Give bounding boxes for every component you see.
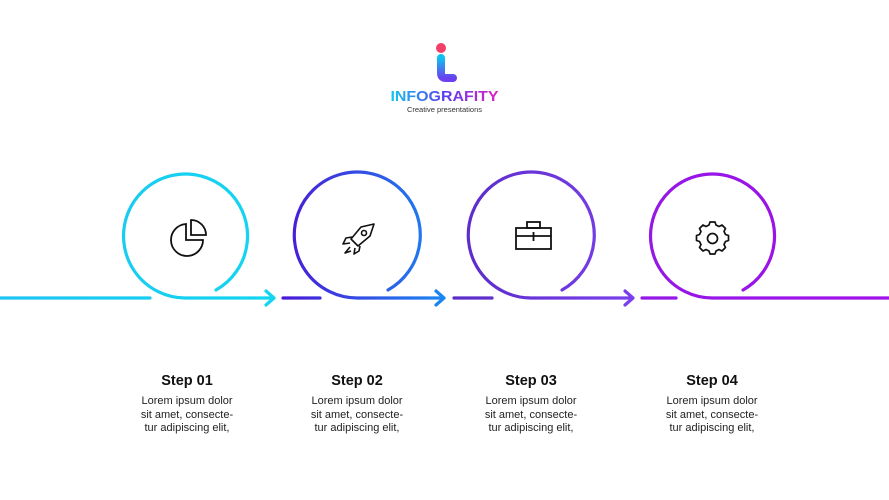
- icon: rocket: [343, 224, 374, 254]
- text: step 04: [666, 373, 758, 434]
- icon: briefcase: [516, 222, 551, 249]
- text: step 01: [141, 373, 233, 434]
- logo: Creative presentations: [407, 105, 482, 114]
- icon: pie chart: [171, 220, 206, 256]
- text: step 03: Step 03: [505, 373, 557, 389]
- text: step 04: Lorem ipsum dolor: [666, 395, 758, 407]
- text: step 01: tur adipiscing elit,: [144, 422, 230, 434]
- text: step 02: [311, 373, 403, 434]
- step 2 timeline loop: [283, 172, 444, 305]
- logo: [390, 43, 498, 114]
- text: step 03: sit amet, consecte-: [485, 408, 577, 420]
- step 1 timeline loop: [0, 174, 274, 305]
- icon: gear: [696, 222, 728, 254]
- text: step 04: sit amet, consecte-: [666, 408, 758, 420]
- text: step 02: Step 02: [331, 373, 383, 389]
- text: step 01: Step 01: [161, 373, 213, 389]
- text: step 02: Lorem ipsum dolor: [311, 395, 403, 407]
- text: step 01: Lorem ipsum dolor: [141, 395, 233, 407]
- text: step 01: sit amet, consecte-: [141, 408, 233, 420]
- text: step 04: Step 04: [686, 373, 738, 389]
- text: step 03: Lorem ipsum dolor: [485, 395, 577, 407]
- step 3 timeline loop: [454, 172, 633, 305]
- text: step 03: [485, 373, 577, 434]
- text: step 03: tur adipiscing elit,: [488, 422, 574, 434]
- text: step 04: tur adipiscing elit,: [670, 422, 754, 434]
- text: step 02: sit amet, consecte-: [311, 408, 403, 420]
- logo: INFOGRAFITY: [390, 88, 498, 105]
- text: step 02: tur adipiscing elit,: [314, 422, 400, 434]
- step 4 timeline loop: [642, 174, 889, 298]
